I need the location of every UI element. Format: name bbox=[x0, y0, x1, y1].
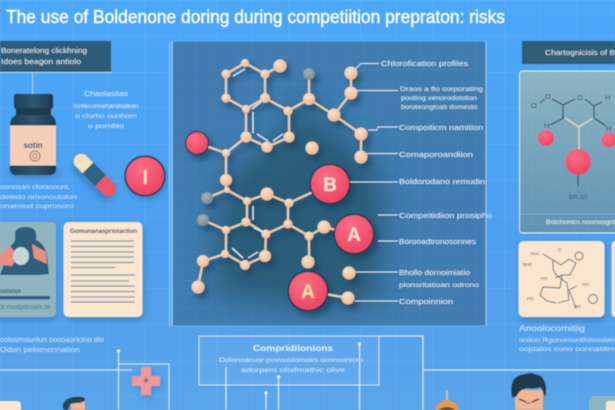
icon: medical cross bbox=[132, 367, 162, 397]
panel: left header bbox=[0, 41, 112, 72]
labels: Bhollo dornoimiatio bbox=[399, 268, 470, 277]
marker B bbox=[310, 164, 350, 204]
text: left lower caption: Odon pelomonnation bbox=[0, 345, 80, 354]
panel: right header bbox=[522, 41, 615, 64]
molecule atoms bbox=[192, 59, 368, 304]
panel: right chemical card bbox=[520, 71, 615, 233]
card: right skeletal formula bbox=[518, 241, 606, 321]
text: left lower caption bbox=[0, 335, 104, 354]
text: right caption: onilon Rgonornontfolsoolan bbox=[519, 337, 615, 344]
text: left note: o pomblo bbox=[88, 123, 124, 130]
card: right skeletal formula: NH bbox=[574, 304, 580, 309]
text: left caption bbox=[0, 184, 77, 210]
leader lines bbox=[350, 64, 398, 301]
labels: Compoinnion bbox=[399, 297, 453, 306]
text: left note: Chaolastias bbox=[84, 89, 128, 98]
text: left caption: oonosan clorasounl, bbox=[0, 184, 70, 191]
card: lower left corner bbox=[0, 401, 21, 410]
text: left lower caption: oolosmounlun oosoaoricino dlo bbox=[0, 335, 104, 344]
panel: right header: Chartognicisis of B bbox=[545, 48, 615, 57]
card: right skeletal formula: O bbox=[558, 247, 562, 252]
card: right skeletal formula: BHE bbox=[523, 262, 532, 267]
panel: left header: Boneratelong clickhning bbox=[1, 46, 87, 55]
labels: boroteongtoab domestic bbox=[401, 104, 479, 111]
card: right skeletal formula: HO bbox=[541, 276, 548, 281]
title: The use of Boldenone doring during competiition prepraton: risks bbox=[6, 6, 505, 27]
card: right skeletal formula: HO bbox=[527, 296, 534, 301]
card: right skeletal formula: Amo bbox=[530, 251, 540, 256]
card: athlete bbox=[0, 222, 56, 320]
labels: Comaporoandiion bbox=[399, 150, 473, 159]
conclusion box: Compridilonions bbox=[253, 344, 334, 353]
panel: right chemical card: H bbox=[544, 121, 549, 130]
molecule shadow bbox=[215, 100, 385, 310]
panel: right chemical card: Bolchonics noonoogol bbox=[546, 219, 615, 226]
icon: supplement bottle: sotin bbox=[23, 141, 43, 150]
panel: right chemical card: O bbox=[531, 101, 537, 110]
labels: Boldorodano remudin bbox=[399, 177, 485, 186]
labels bbox=[381, 59, 492, 306]
molecule group bbox=[185, 59, 374, 312]
text: right caption bbox=[519, 324, 615, 353]
card: right edge bbox=[612, 241, 615, 317]
marker A lower bbox=[288, 270, 328, 312]
text: right caption: Anoolocornitiig bbox=[519, 324, 585, 333]
marker B: B bbox=[323, 175, 337, 196]
card: lower right thumbnail bbox=[589, 396, 615, 410]
icon: person at lower right bbox=[511, 373, 546, 410]
card: right skeletal formula: OH bbox=[582, 282, 589, 287]
red atoms bbox=[538, 130, 615, 175]
icon: orange bulb bbox=[435, 390, 459, 410]
labels: Compoiticm namition bbox=[399, 123, 483, 132]
labels: plonsritatioan odrono bbox=[399, 282, 479, 289]
panel: right chemical card: H bbox=[605, 93, 610, 102]
connector lines: lower left bbox=[0, 350, 169, 410]
text: left note bbox=[74, 89, 139, 130]
conclusion box: adorpent ofoifmathic olive bbox=[241, 367, 345, 374]
icon: red marker I bbox=[124, 156, 167, 199]
labels: pooting xenorodoistion bbox=[401, 95, 477, 102]
icon: lower left person bbox=[63, 397, 85, 410]
panel: right chemical card: O bbox=[545, 92, 551, 101]
icon: capsule bbox=[67, 151, 120, 204]
connector lines: lower centre bbox=[226, 336, 615, 410]
card: athlete: 3 molpitoals,lli bbox=[0, 305, 50, 311]
card: competition notes bbox=[64, 222, 144, 320]
molecule bonds bbox=[197, 63, 361, 298]
labels: Compeitidiion prosipho bbox=[399, 211, 492, 220]
panel: right chemical card: H bbox=[606, 124, 611, 133]
conclusion box bbox=[199, 336, 379, 385]
labels: Draos a flo corporating bbox=[400, 86, 483, 93]
red atom bbox=[185, 131, 209, 155]
panel: right chemical card: O bbox=[577, 93, 583, 102]
card: athlete: ooision bbox=[0, 289, 21, 295]
panel: right chemical card: BR-10 bbox=[569, 194, 588, 201]
molecule inner double bonds bbox=[232, 69, 283, 258]
text: left note: o clorho ounhom bbox=[75, 113, 137, 120]
labels: Chlorofication profiles bbox=[381, 59, 468, 68]
text: left caption: onatoiod cuprosoro bbox=[0, 203, 74, 210]
marker A right bbox=[334, 214, 374, 254]
card: competition notes: Gomunanaspriolaction bbox=[70, 228, 137, 235]
text: left caption: deledo omonoutolon bbox=[0, 194, 77, 201]
marker A lower: A bbox=[301, 282, 315, 303]
labels: Borooadtronosonnes bbox=[399, 237, 476, 246]
text: right caption: oojdalos cono oonnatilim bbox=[519, 346, 615, 353]
panel: left header: Idoes beagon antiolo bbox=[1, 57, 81, 66]
chemical structure bbox=[540, 99, 606, 186]
icon: supplement bottle bbox=[8, 94, 60, 178]
text: left note: Ionteconnehandsidean bbox=[74, 103, 139, 110]
panel: central molecule bbox=[170, 41, 492, 326]
conclusion box: Odlonoacusr puvoustomoirs oconsonicrp bbox=[219, 357, 363, 364]
marker A right: A bbox=[347, 225, 361, 246]
